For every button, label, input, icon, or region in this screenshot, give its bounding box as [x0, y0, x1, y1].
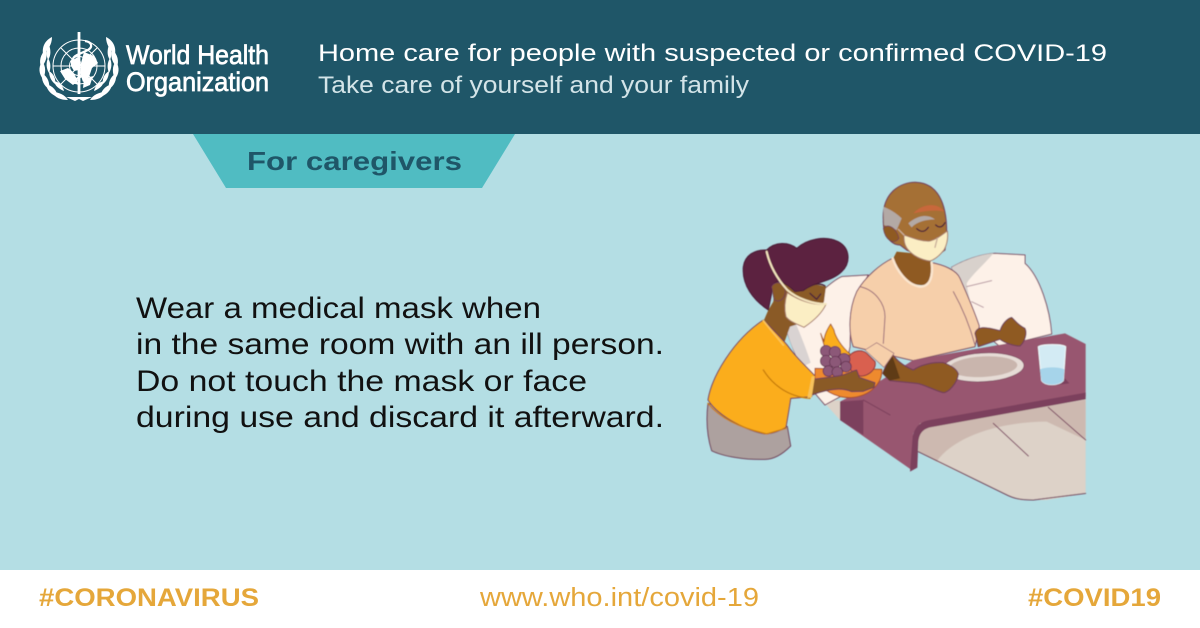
pillow right	[952, 253, 1052, 347]
pillow left	[785, 275, 868, 405]
footer band	[0, 570, 1200, 628]
caregiver: hair	[743, 238, 848, 310]
banana	[821, 324, 850, 357]
WHO logo	[39, 32, 269, 101]
header title: Home care for people with suspected or confirmed COVID-19	[318, 40, 1107, 67]
fruit bowl	[815, 324, 882, 398]
man: neck	[893, 252, 933, 285]
illustration: caregiver bringing food to ill person in bed	[707, 182, 1086, 500]
man: face mask	[898, 229, 948, 261]
pillow shadow	[786, 322, 811, 367]
bed table	[840, 333, 1086, 472]
organisation name: Organization	[126, 67, 269, 97]
main message: Wear a medical mask when	[136, 292, 541, 325]
tab: for caregivers: For caregivers	[247, 146, 462, 176]
man: shirt	[850, 258, 979, 361]
main message: Do not touch the mask or face	[136, 365, 587, 398]
man: left arm and hand holding plate	[865, 343, 958, 393]
man: right hand	[975, 317, 1026, 347]
man: head	[883, 182, 947, 261]
water glass	[1038, 345, 1069, 385]
icon: WHO emblem	[39, 32, 119, 101]
apple	[848, 351, 875, 376]
plate	[942, 351, 1025, 384]
tab: for caregivers	[193, 134, 515, 188]
organisation name	[126, 40, 269, 97]
website: www.who.int/covid-19	[479, 584, 759, 612]
main message	[136, 292, 664, 434]
caregiver: neck and head	[763, 280, 826, 345]
main message: during use and discard it afterward.	[136, 401, 664, 434]
main message: in the same room with an ill person.	[136, 328, 664, 361]
caregiver: ear	[772, 283, 785, 301]
hashtag left: #CORONAVIRUS	[39, 584, 259, 612]
header band	[0, 0, 1200, 134]
caregiver: trousers	[707, 403, 791, 459]
bed blanket	[823, 393, 1086, 500]
caregiver: sweater	[708, 320, 815, 434]
grapes	[820, 345, 851, 377]
organisation name: World Health	[126, 40, 269, 70]
header subtitle: Take care of yourself and your family	[318, 72, 750, 99]
hashtag right: #COVID19	[1028, 584, 1161, 612]
caregiver: arm and hands	[807, 370, 875, 398]
caregiver: face mask	[767, 252, 826, 327]
